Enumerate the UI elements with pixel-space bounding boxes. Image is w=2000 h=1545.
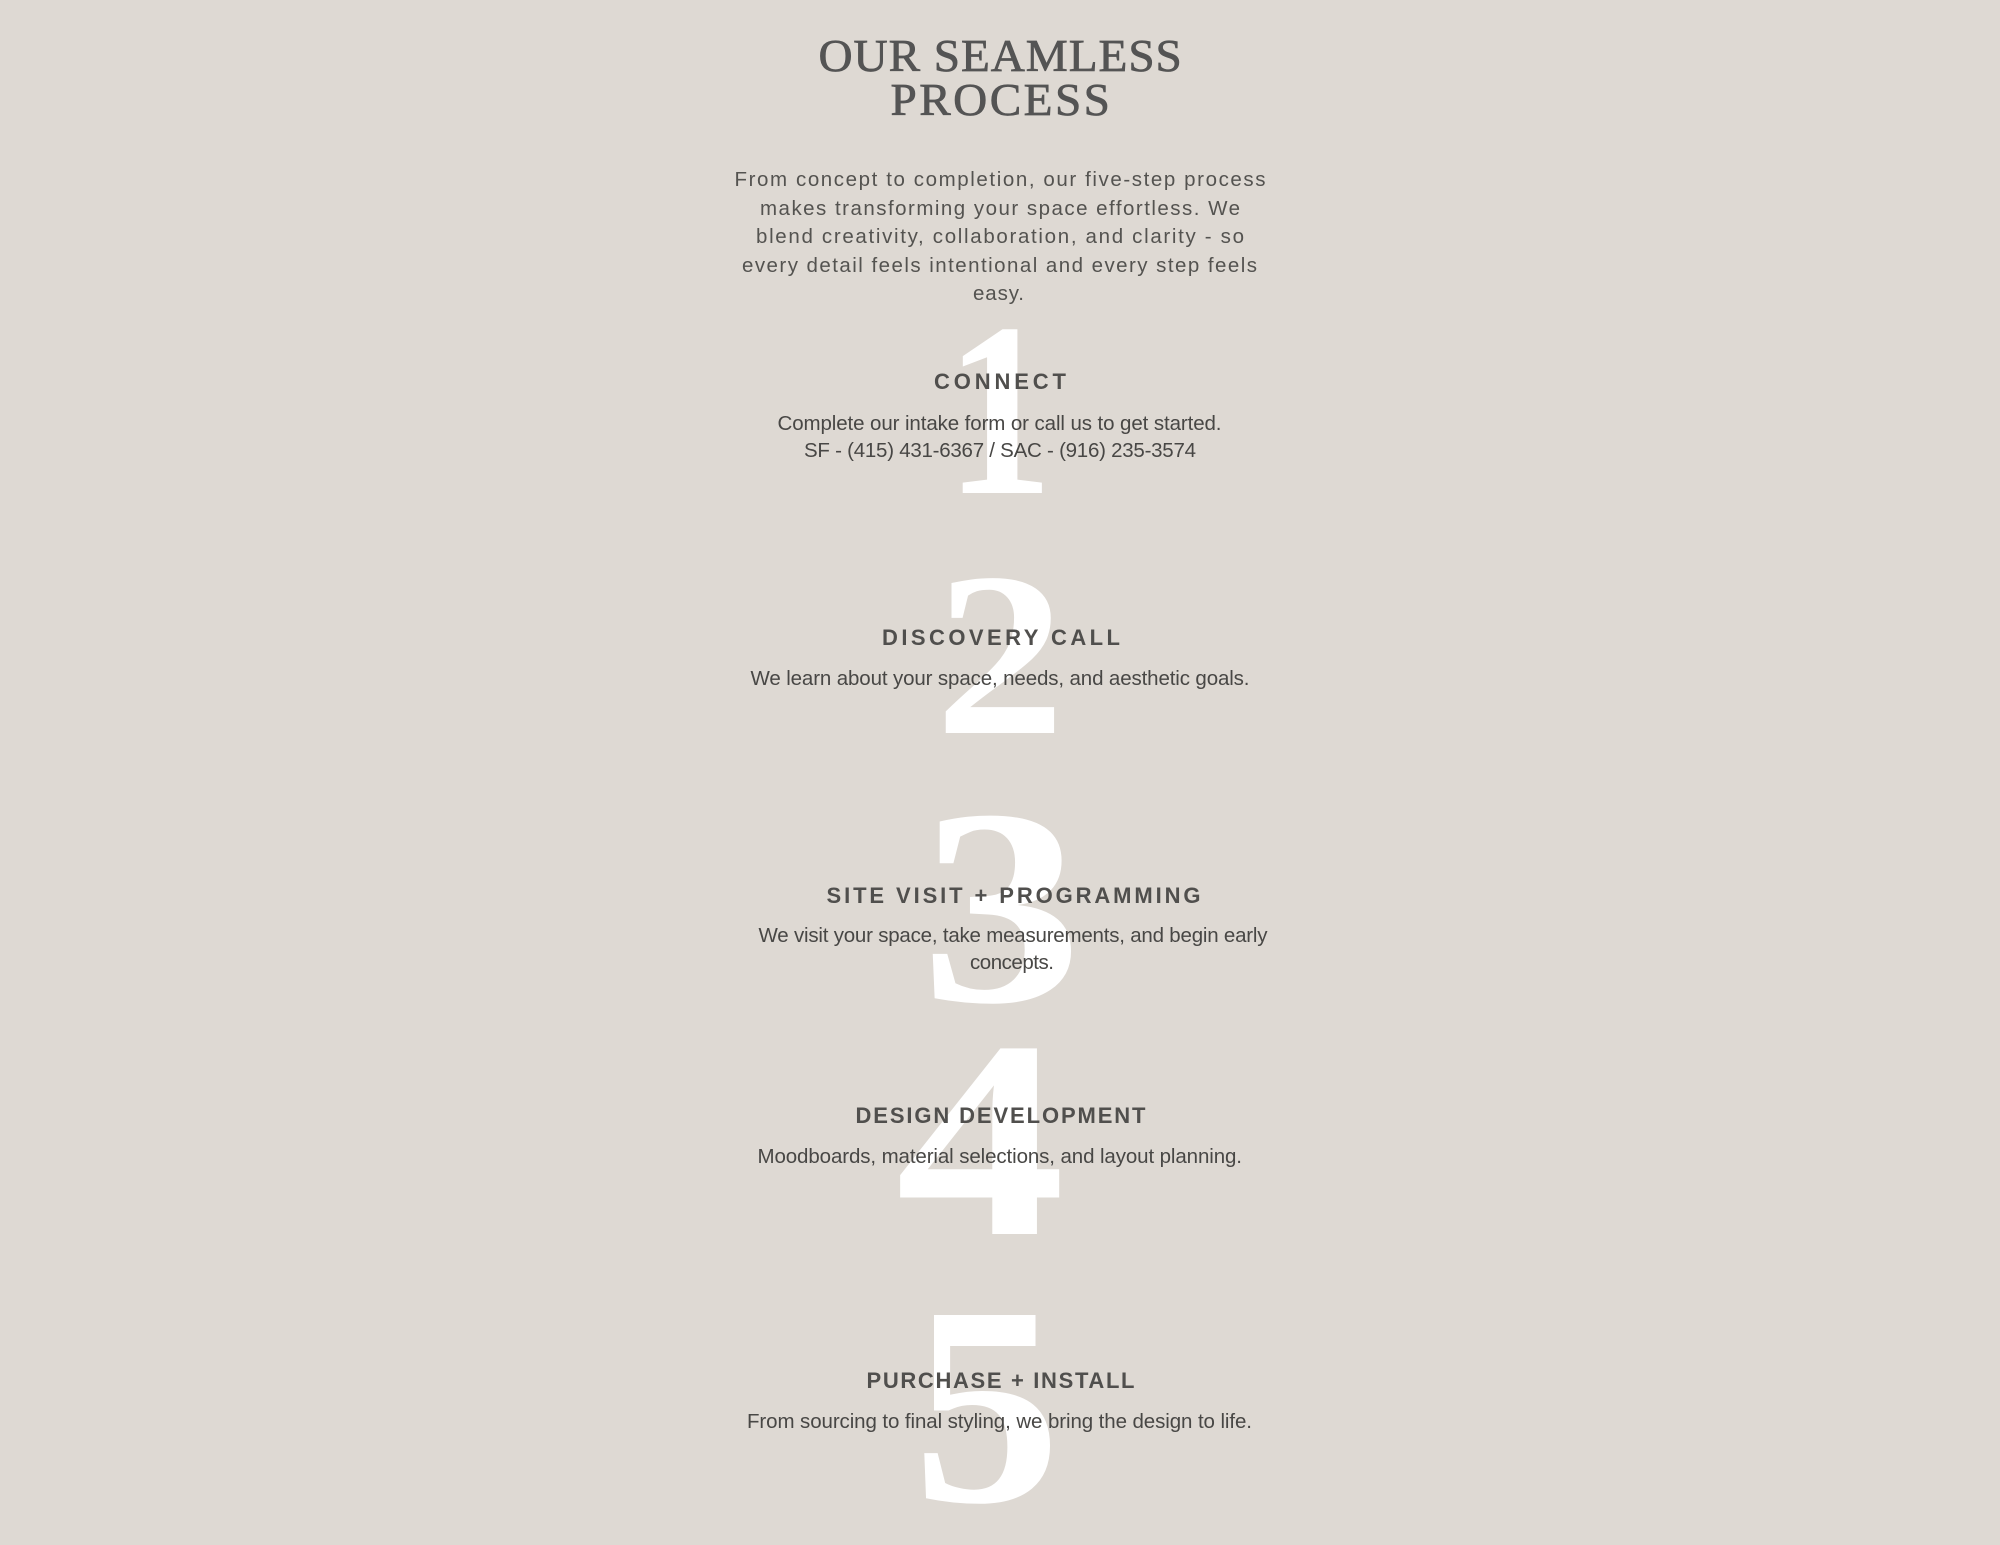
step 3 description: We visit your space, take measurements, and begin early: [758, 924, 1268, 947]
numeral 4: 4: [896, 983, 1065, 1295]
intro paragraph: every detail feels intentional and every step feels: [742, 254, 1257, 277]
step 4: design development: [758, 983, 1242, 1295]
step 5: purchase + install: [747, 1248, 1252, 1545]
numeral 1: 1: [946, 273, 1053, 547]
numeral 3: 3: [921, 753, 1082, 1062]
step 1 description: [778, 412, 1222, 462]
intro paragraph: makes transforming your space effortless. We: [760, 197, 1240, 220]
step 3 heading: SITE VISIT + PROGRAMMING: [826, 883, 1200, 908]
step 2 heading: DISCOVERY CALL: [882, 625, 1120, 650]
step 3 description: [758, 924, 1268, 974]
title: OUR SEAMLESS: [818, 31, 1182, 81]
title: PROCESS: [890, 75, 1110, 125]
step 5 heading: PURCHASE + INSTALL: [866, 1368, 1134, 1393]
numeral 2: 2: [935, 524, 1065, 784]
intro paragraph: easy.: [973, 282, 1024, 305]
step 5 description: From sourcing to final styling, we bring the design to life.: [747, 1410, 1252, 1433]
step 1 description: Complete our intake form or call us to get started.: [778, 412, 1222, 435]
step 2: discovery call: [750, 524, 1250, 784]
intro paragraph: [734, 168, 1266, 305]
step 4 heading: DESIGN DEVELOPMENT: [856, 1103, 1146, 1128]
step 3 description: concepts.: [970, 951, 1054, 974]
intro paragraph: From concept to completion, our five-step process: [734, 168, 1266, 191]
step 4 description: Moodboards, material selections, and layout planning.: [758, 1145, 1242, 1168]
title: [818, 31, 1182, 125]
step 1 heading: CONNECT: [934, 369, 1067, 394]
intro paragraph: blend creativity, collaboration, and clarity - so: [756, 225, 1244, 248]
step 1: connect: [778, 273, 1222, 547]
step 2 description: We learn about your space, needs, and aesthetic goals.: [750, 667, 1250, 690]
step 3: site visit + programming: [758, 753, 1268, 1062]
step 1 description: SF - (415) 431-6367 / SAC - (916) 235-3574: [804, 439, 1196, 462]
